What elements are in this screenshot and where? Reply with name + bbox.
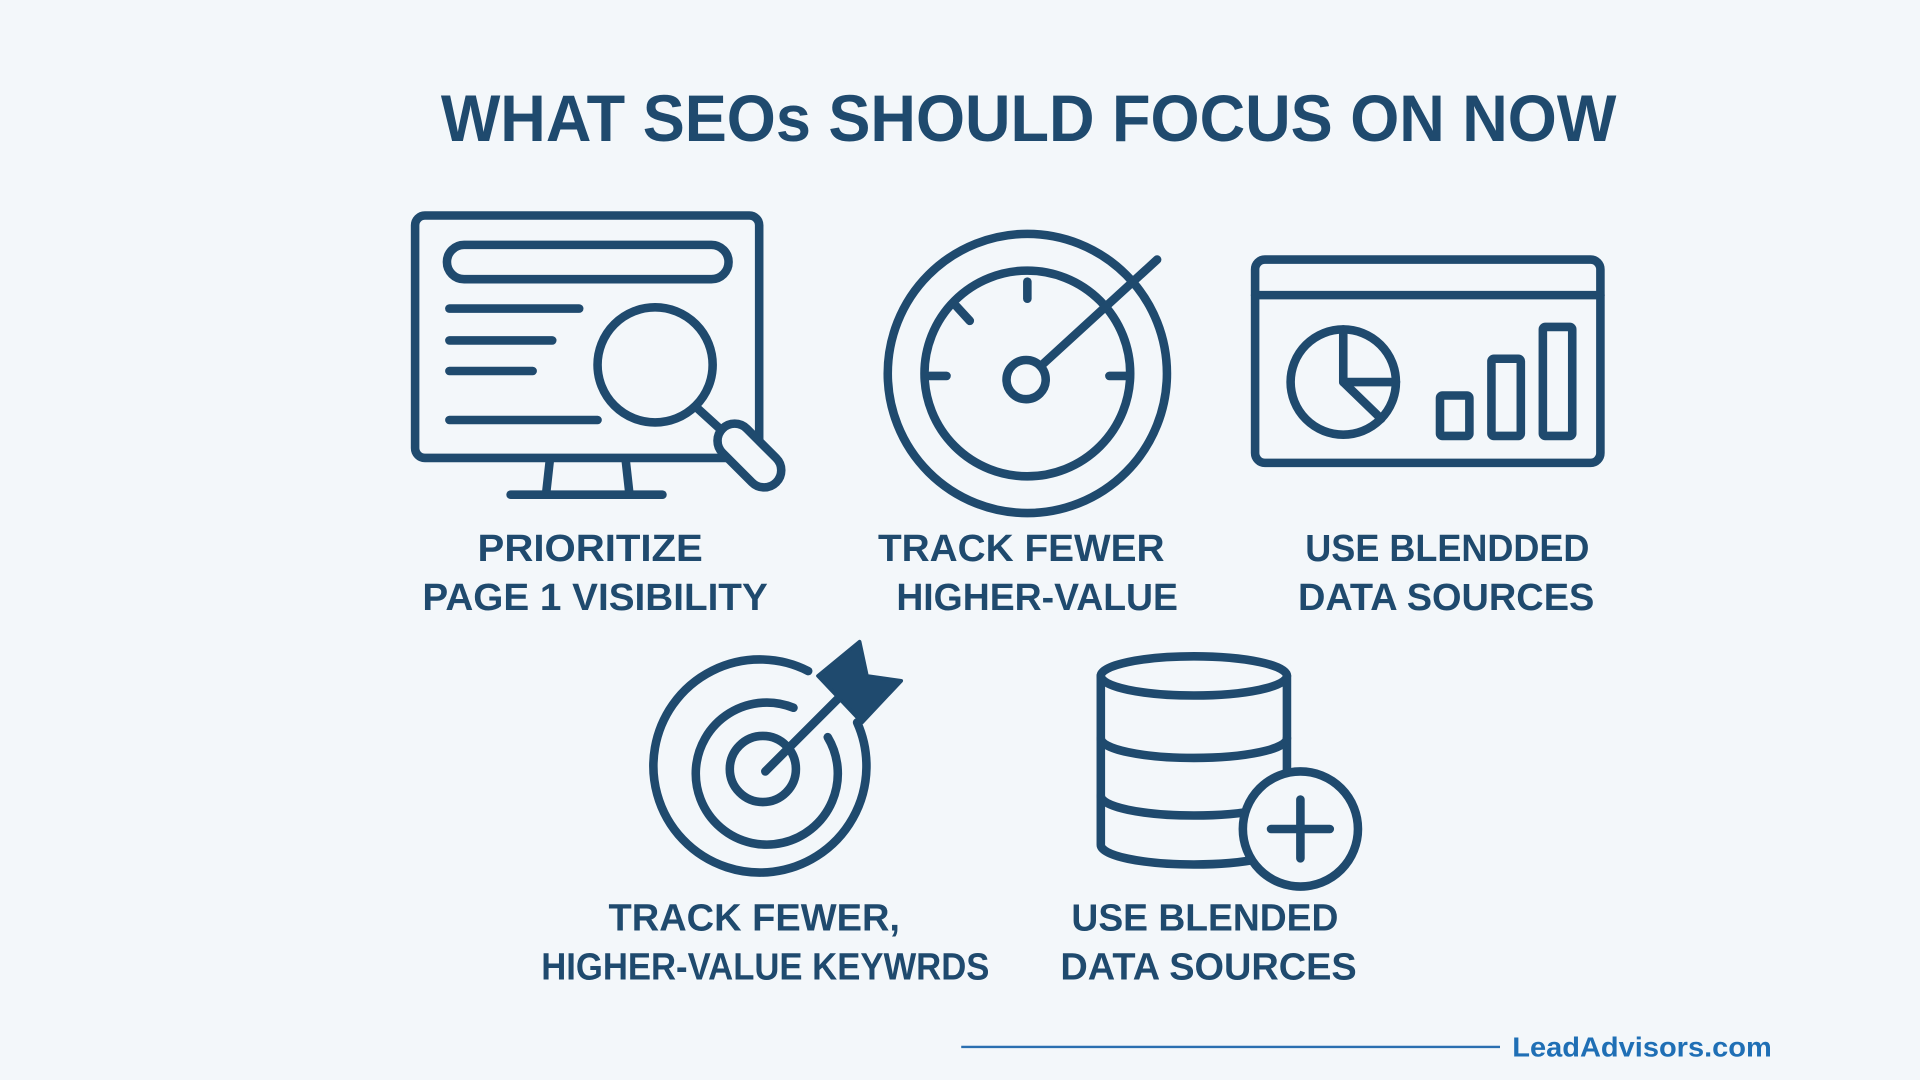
label: use blendded data sources <box>1298 528 1594 619</box>
label: use blendded data sources: USE BLENDDED <box>1305 528 1589 570</box>
icon: gauge <box>888 234 1167 513</box>
label: track fewer, higher-value keywrds: TRACK FEWER, <box>609 898 900 940</box>
label: track fewer, higher-value keywrds: HIGHER-VALUE KEYWRDS <box>541 947 989 989</box>
label: track fewer higher-value: HIGHER-VALUE <box>896 577 1178 619</box>
icon: database with plus <box>1101 656 1358 887</box>
label: use blended data sources <box>1060 898 1357 989</box>
label: track fewer, higher-value keywrds <box>541 898 989 989</box>
footer: brand line and name: LeadAdvisors.com <box>1512 1032 1772 1063</box>
label: prioritize page 1 visibility <box>422 528 768 619</box>
icon: monitor with magnifier <box>415 216 788 495</box>
label: use blended data sources: USE BLENDED <box>1071 898 1338 940</box>
label: use blended data sources: DATA SOURCES <box>1060 947 1357 989</box>
icon: target with arrow <box>653 642 901 873</box>
title: WHAT SEOs SHOULD FOCUS ON NOW <box>441 82 1617 156</box>
label: track fewer higher-value <box>878 528 1178 619</box>
label: prioritize page 1 visibility: PRIORITIZE <box>478 528 703 570</box>
label: prioritize page 1 visibility: PAGE 1 VISIBILITY <box>422 577 768 619</box>
icon: dashboard <box>1255 260 1600 463</box>
label: track fewer higher-value: TRACK FEWER <box>878 528 1164 570</box>
label: use blendded data sources: DATA SOURCES <box>1298 577 1594 619</box>
